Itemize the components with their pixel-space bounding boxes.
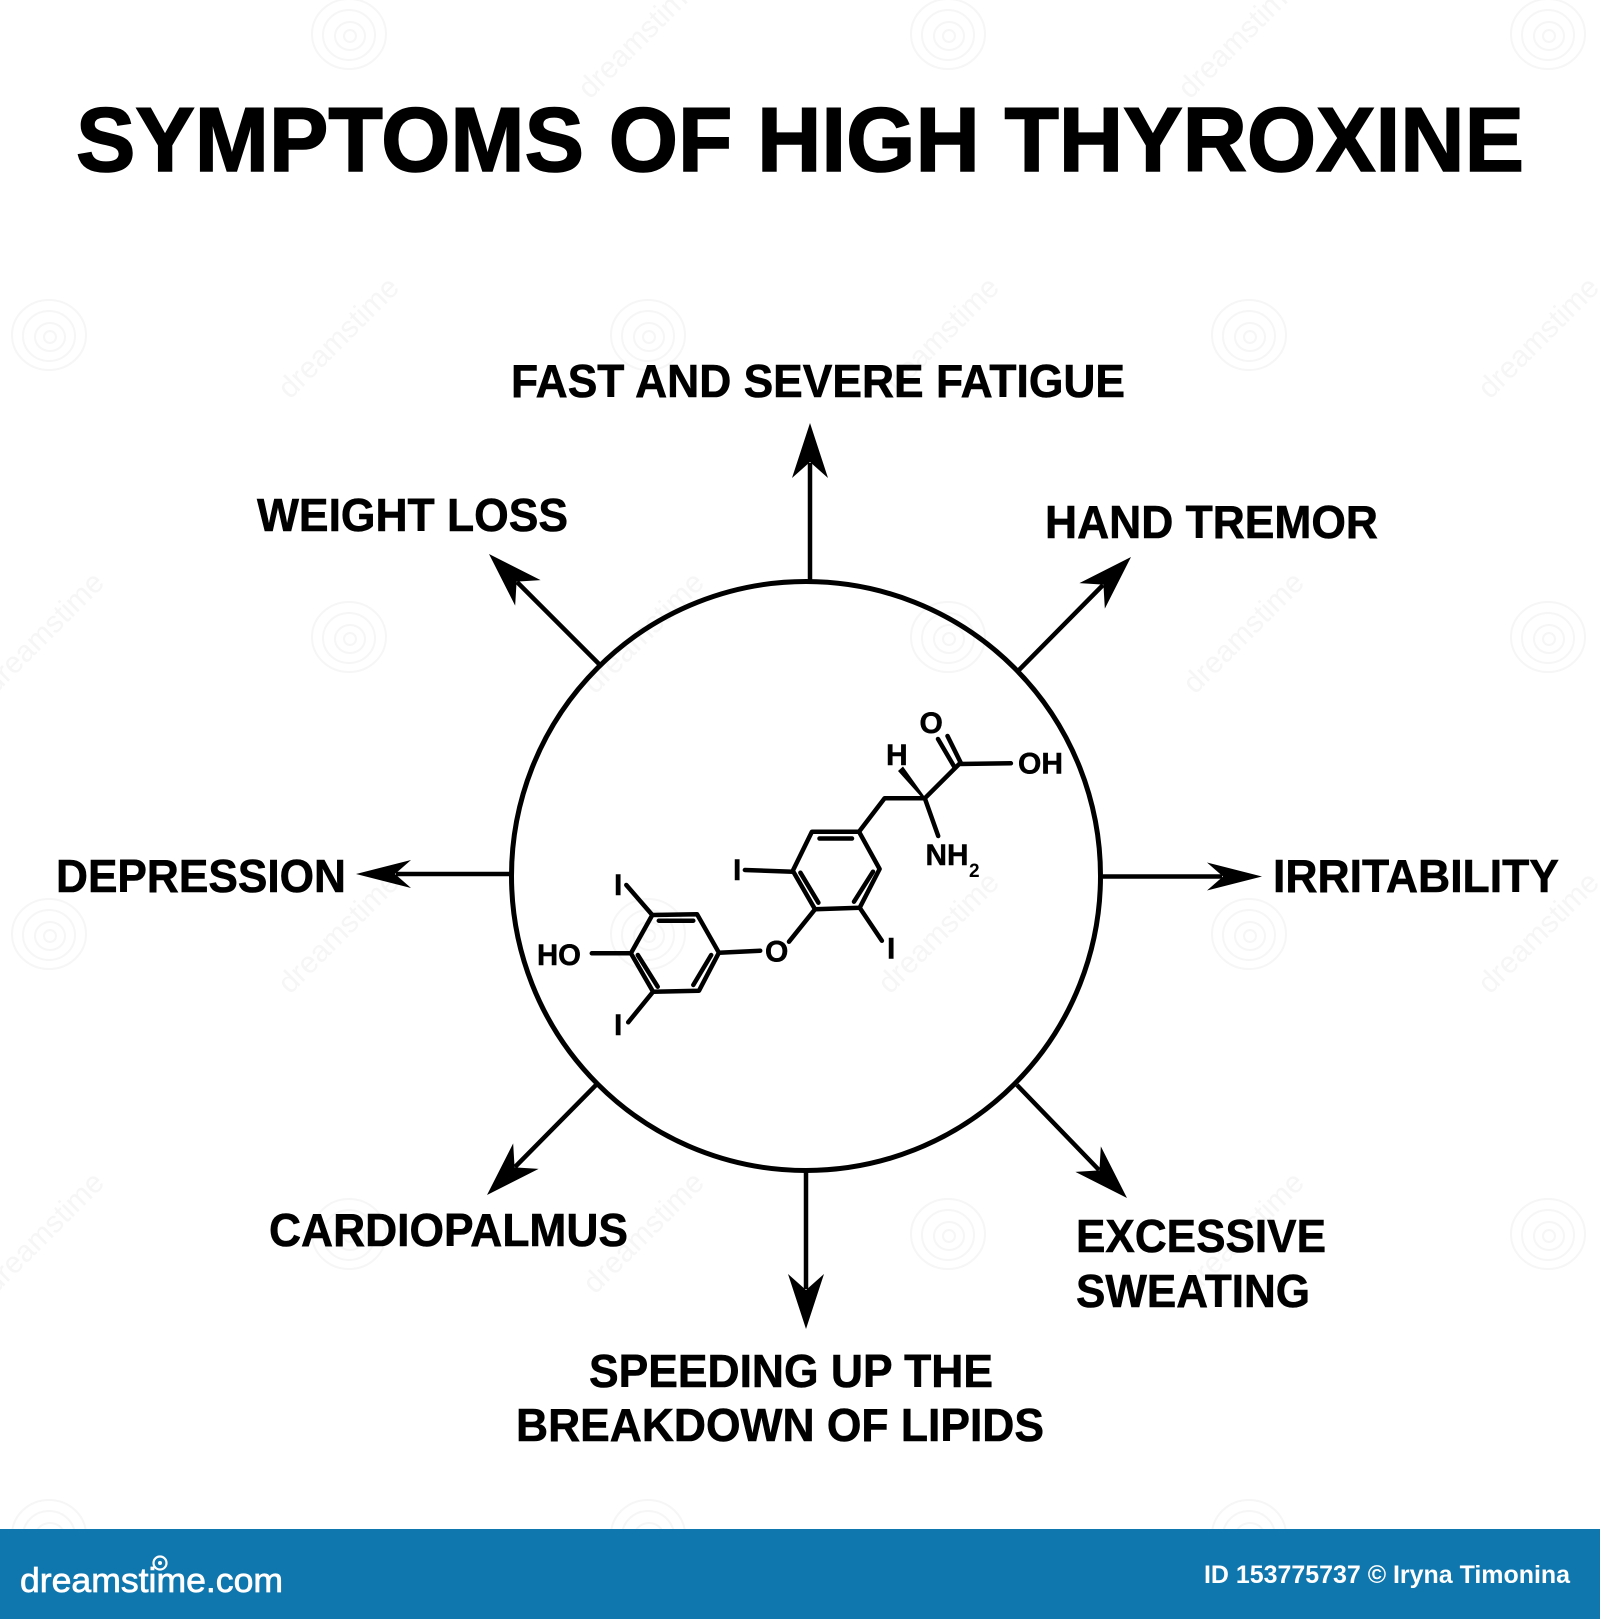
- atom labels: O: [920, 707, 943, 740]
- watermark pattern: dreamstime: [872, 271, 1006, 405]
- atom labels: HO: [537, 939, 581, 972]
- atom labels: [537, 707, 1063, 1042]
- label: cardiopalmus: CARDIOPALMUS: [269, 1204, 628, 1256]
- label: speeding up the breakdown of lipids: BREAKDOWN OF LIPIDS: [516, 1399, 1044, 1451]
- arrow: bottom: [788, 1172, 824, 1329]
- label: irritability: IRRITABILITY: [1273, 850, 1559, 902]
- atom labels: 2: [969, 861, 980, 882]
- atom labels: I: [733, 854, 741, 887]
- watermark pattern: dreamstime: [577, 566, 711, 700]
- label: excessive sweating: SWEATING: [1076, 1265, 1310, 1317]
- watermark pattern: dreamstime: [272, 271, 406, 405]
- thyroxine molecule: [537, 707, 1063, 1042]
- watermark pattern: dreamstime: [872, 866, 1006, 1000]
- lower benzene ring: [631, 914, 719, 992]
- atom labels: OH: [1018, 748, 1063, 780]
- molecular bonds: [592, 736, 1011, 1022]
- atom labels: I: [614, 1009, 622, 1042]
- atom labels: I: [614, 869, 622, 902]
- label: excessive sweating: EXCESSIVE: [1076, 1210, 1326, 1262]
- watermark pattern: dreamstime: [272, 866, 406, 1000]
- arrow: left: [356, 860, 511, 888]
- watermark pattern: dreamstime: [1177, 566, 1311, 700]
- label: weight loss: WEIGHT LOSS: [257, 489, 568, 541]
- arrow: upper right: [1019, 544, 1144, 670]
- footer image credit: ID 153775737 © Iryna Timonina: [1204, 1561, 1571, 1589]
- arrow: lower left: [474, 1084, 597, 1208]
- atom labels: NH: [926, 839, 968, 872]
- atom labels: O: [765, 936, 788, 968]
- label: excessive sweating: [1076, 1210, 1326, 1317]
- atom labels: I: [887, 932, 895, 966]
- arrow: top: [792, 423, 828, 580]
- watermark pattern: dreamstime: [577, 1166, 711, 1300]
- label: depression: DEPRESSION: [56, 850, 346, 902]
- central circle: [512, 582, 1100, 1170]
- label: hand tremor: HAND TREMOR: [1045, 496, 1378, 548]
- label: speeding up the breakdown of lipids: SPEEDING UP THE: [589, 1345, 993, 1397]
- label: speeding up the breakdown of lipids: [516, 1345, 1044, 1451]
- arrow: lower right: [1017, 1085, 1140, 1211]
- label: fast and severe fatigue: FAST AND SEVERE FATIGUE: [511, 355, 1125, 407]
- watermark pattern: dreamstime: [1177, 1166, 1311, 1300]
- arrow: upper left: [476, 541, 600, 665]
- arrow: right: [1103, 862, 1262, 890]
- upper benzene ring: [793, 832, 880, 909]
- atom labels: H: [886, 739, 908, 772]
- title: SYMPTOMS OF HIGH THYROXINE: [76, 90, 1524, 191]
- footer logo: dreamstime.com: [20, 1562, 283, 1600]
- wedge bond to hydrogen: [898, 766, 926, 800]
- footer band: [0, 1529, 1600, 1619]
